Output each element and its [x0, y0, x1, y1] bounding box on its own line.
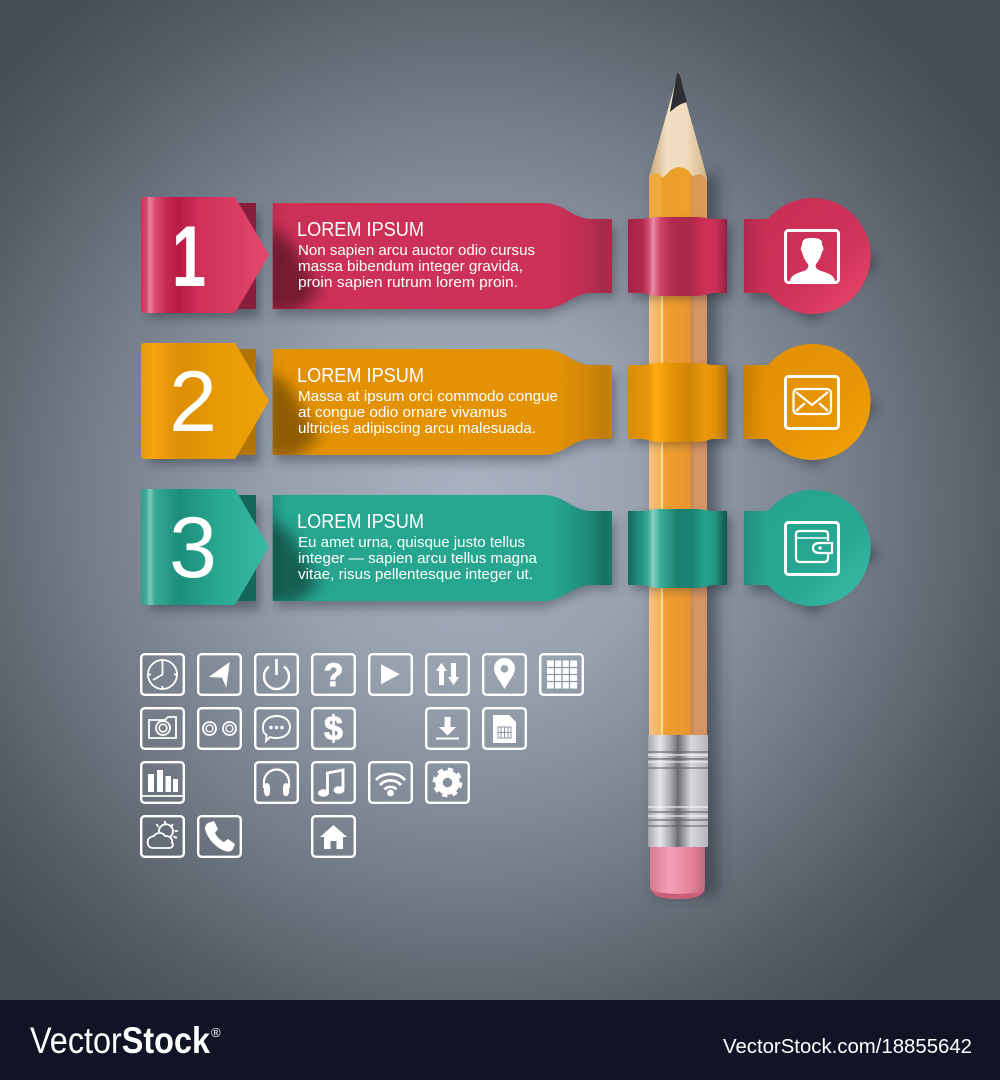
number tab 3	[141, 489, 269, 610]
icon: question	[312, 654, 355, 695]
icon: map pin	[483, 654, 526, 695]
pencil wrap 1	[628, 217, 731, 298]
icon: play	[369, 654, 412, 695]
icon: camera	[141, 708, 184, 749]
row 3: teal	[141, 489, 878, 614]
text band 1	[266, 203, 616, 316]
text band 2: at congue odio ornare vivamus	[298, 405, 507, 421]
icon: up down arrows	[426, 654, 469, 695]
text band 2: ultricies adipiscing arcu malesuada.	[298, 421, 536, 437]
icon: home	[312, 816, 355, 857]
row 2: amber	[141, 343, 878, 468]
pencil wrap 3	[628, 509, 731, 590]
pencil lead	[670, 73, 687, 112]
text band 1: Non sapien arcu auctor odio cursus	[298, 243, 535, 259]
icon: tape	[198, 708, 241, 749]
text band 2: Massa at ipsum orci commodo congue	[298, 389, 558, 405]
pencil	[648, 73, 718, 899]
icon: download	[426, 708, 469, 749]
icon: wifi	[369, 762, 412, 803]
text band 1: massa bibendum integer gravida,	[298, 259, 523, 275]
number tab 1: 1	[172, 209, 206, 305]
number tab 2: 2	[169, 354, 217, 450]
ferrule	[648, 735, 708, 847]
text band 2: LOREM IPSUM	[297, 365, 424, 387]
text band 3: integer — sapien arcu tellus magna	[298, 551, 538, 567]
pencil wood tip	[649, 73, 707, 179]
pencil body upper	[649, 150, 707, 220]
icon: phone	[198, 816, 241, 857]
eraser	[650, 847, 705, 899]
icon: sim card	[483, 708, 526, 749]
pencil shadow	[656, 175, 718, 895]
footer logo: VectorStock	[30, 1020, 210, 1061]
icon: headphones	[255, 762, 298, 803]
icon: envelope	[786, 376, 838, 428]
registered mark: ®	[211, 1025, 221, 1040]
pencil body	[649, 150, 707, 735]
number tab 2	[141, 343, 269, 464]
icon: music	[312, 762, 355, 803]
text band 1: proin sapien rutrum lorem proin.	[298, 275, 518, 291]
text band 3: LOREM IPSUM	[297, 511, 424, 533]
icon: dollar	[312, 708, 355, 749]
icon: weather	[141, 816, 184, 857]
icon: wallet	[786, 522, 838, 574]
icon: gear	[426, 762, 469, 803]
icon: person	[786, 230, 838, 282]
pencil wrap 2	[628, 363, 731, 444]
text band 3: Eu amet urna, quisque justo tellus	[298, 535, 525, 551]
footer url: VectorStock.com/18855642	[723, 1036, 972, 1058]
text band 1: LOREM IPSUM	[297, 219, 424, 241]
icon: question: ?	[324, 657, 343, 693]
number tab 3: 3	[169, 500, 217, 596]
text band 2	[266, 349, 616, 462]
icon: bar chart	[141, 762, 184, 803]
footer bar	[0, 1000, 1000, 1080]
circle tab 1	[744, 198, 878, 322]
icon: power	[255, 654, 298, 695]
number tab 1	[141, 197, 269, 318]
icon: dollar: $	[324, 710, 343, 748]
circle tab 2	[744, 344, 878, 468]
row 1: crimson	[141, 197, 878, 322]
icon: chat	[255, 708, 298, 749]
icon: grid	[540, 654, 583, 695]
circle tab 3	[744, 490, 878, 614]
icon grid	[141, 654, 583, 857]
icon: navigation	[198, 654, 241, 695]
icon: clock	[141, 654, 184, 695]
text band 3	[266, 495, 616, 608]
text band 3: vitae, risus pellentesque integer ut.	[298, 567, 533, 583]
